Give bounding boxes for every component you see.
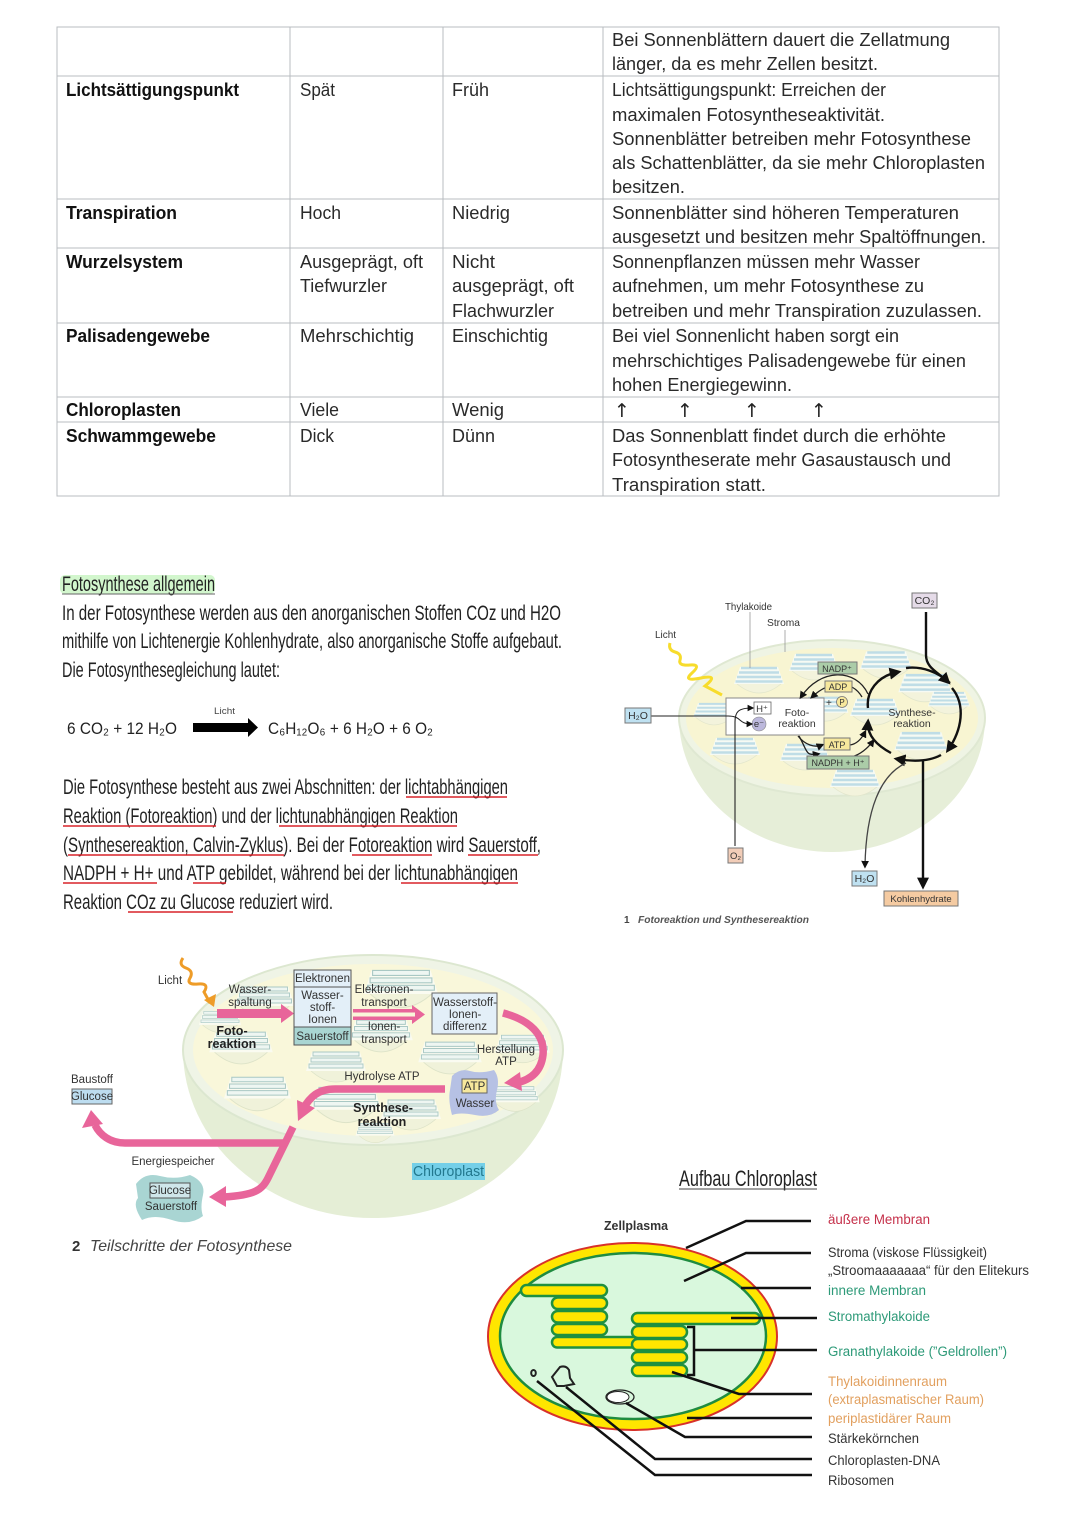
text block: Einleitung: Die Fotosynthesegleichung lautet: [62,659,280,682]
label: Baustoff Glucose [71,1074,114,1104]
row: Transpiration: Hoch [300,203,341,223]
arrowheads [82,1100,315,1207]
equation: Fotosynthesegleichung: Licht [214,706,235,717]
DNA, ribosome, starch [531,1366,634,1404]
labels: innere Membran [828,1283,926,1298]
box: Wasserstoff-Ionen-Differenz: Ionen- [449,1009,481,1021]
leader lines [537,1221,817,1475]
row: Zellatmung [612,30,950,74]
labels: Stroma (viskose Flüssigkeit) [828,1245,987,1260]
heading: Fotosynthese allgemein: Fotosynthese allgemein [62,573,215,596]
row: Transpiration: Transpiration [66,203,177,223]
diagram: Aufbau Chloroplast [488,1212,1029,1488]
row: Transpiration: Sonnenblätter sind höheren Temperaturen [612,203,959,223]
caption 1: 1 [624,915,630,926]
equation: Fotosynthesegleichung [67,706,433,738]
row: Chloroplasten: Wenig [452,400,504,420]
box stack: Elektronen, Wasserstoffionen, Sauerstoff: Sauerstoff [296,1031,349,1043]
labels: (extraplasmatischer Raum) [828,1392,984,1407]
blob: Glucose, Sauerstoff: Glucose [149,1185,191,1197]
label boxes: H₂O [855,873,874,885]
text: Synthesereaktion: Synthese- [888,707,936,719]
row: Transpiration: Niedrig [452,203,510,223]
Licht label and icon: Licht [158,975,183,987]
row: Schwammgewebe: Dick [300,426,335,446]
label boxes: CO₂ [915,595,934,607]
text: Synthesereaktion [888,707,936,730]
text: Fotoreaktion: Foto- [216,1024,248,1038]
text: Hydrolyse ATP und Synthesereaktion: reaktion [358,1115,406,1129]
row: Lichtsättigungspunkt: Sonnenblätter betreiben mehr Fotosynthese [612,129,971,149]
row: Wurzelsystem: Tiefwurzler [300,276,387,296]
text block: zwei Abschnitte: Die Fotosynthese besteht aus zwei Abschnitten: der lichtabhängigen [63,776,508,799]
text block: zwei Abschnitte: NADPH + H+ und ATP gebildet, während bei der lichtunabhängigen [63,862,518,885]
label boxes: Kohlenhydrate [890,894,952,905]
text: Fotoreaktion [208,984,414,1051]
text: Hydrolyse ATP und Synthesereaktion: Synthese- [353,1101,413,1115]
row: Lichtsättigungspunkt: Früh [452,80,489,100]
row: Wurzelsystem: aufnehmen, um mehr Fotosynthese zu [612,276,924,296]
text block: zwei Abschnitte [63,776,541,914]
row: Lichtsättigungspunkt [66,80,985,197]
row: Zellatmung: länger, da es mehr Zellen besitzt. [612,54,878,74]
box stack: Elektronen, Wasserstoffionen, Sauerstoff: Ionen [308,1014,337,1026]
row: Chloroplasten: Chloroplasten [66,400,181,420]
labels: Thylakoide, Stroma, Licht [655,601,800,668]
box: Fotoreaktion: e⁻ [754,719,764,730]
row: Wurzelsystem [66,252,982,321]
table: Sonnenblatt und Schattenblatt [57,27,999,496]
arrow: Herstellung ATP: Herstellung [477,1044,535,1056]
row: Palisadengewebe [66,326,966,395]
row: Palisadengewebe: hohen Energiegewinn. [612,375,792,395]
labels: Stärkekörnchen [828,1431,919,1446]
label boxes: H₂O [628,710,648,722]
label: Zellplasma: Zellplasma [604,1219,669,1233]
text: Fotoreaktion: spaltung [228,997,272,1009]
text: Hydrolyse ATP und Synthesereaktion: Hydrolyse ATP [344,1071,420,1083]
box stack: Elektronen, Wasserstoffionen, Sauerstoff: Elektronen [295,973,350,985]
text block: zwei Abschnitte: (Synthesereaktion, Calvin-Zyklus). Bei der Fotoreaktion wird Sauerstoff, [63,834,541,857]
small cycle arrows [798,675,873,757]
row: Lichtsättigungspunkt: besitzen. [612,177,685,197]
row: Chloroplasten: Viele [300,400,339,420]
label boxes: + [826,698,832,709]
chloroplast bowl [679,640,985,852]
table grid [57,27,999,496]
text block: Einleitung [62,602,562,682]
box: Fotoreaktion [726,698,824,735]
label: Chloroplast: Chloroplast [413,1163,485,1180]
label: Baustoff Glucose: Baustoff [71,1074,114,1086]
Synthesereaktion cycle [868,612,961,886]
labels: Thylakoidinnenraum [828,1374,947,1389]
caption 2: Teilschritte der Fotosynthese [90,1238,292,1255]
row: Schwammgewebe: Dünn [452,426,495,446]
labels [828,1212,1029,1488]
box: Wasserstoff-Ionen-Differenz [432,993,497,1034]
thylakoid stacks [199,970,550,1143]
Licht label and icon [158,958,216,1007]
labels: „Stroomaaaaaaa“ für den Elitekurs [828,1263,1029,1278]
arrow: Herstellung ATP: ATP [495,1056,517,1068]
label boxes: NADPH + H⁺ [811,758,865,768]
labels: Thylakoide, Stroma, Licht: Thylakoide [725,601,772,613]
blob: Glucose, Sauerstoff [136,1175,203,1222]
row: Lichtsättigungspunkt: Lichtsättigungspunkt [66,80,239,100]
caption 2: 2 [72,1238,80,1255]
box: Wasserstoff-Ionen-Differenz: Wasserstoff- [433,997,497,1009]
row: Wurzelsystem: Nicht [452,252,495,272]
label: Energiespeicher: Energiespeicher [131,1156,215,1168]
row: Palisadengewebe: mehrschichtiges Palisadengewebe für einen [612,351,966,371]
text: Hydrolyse ATP und Synthesereaktion [344,1071,420,1129]
row: Wurzelsystem: ausgeprägt, oft [452,276,574,296]
text block: Einleitung: In der Fotosynthese werden aus den anorganischen Stoffen COz und H2O [62,602,561,625]
text: Fotoreaktion: Ionen- [368,1021,400,1033]
row: Lichtsättigungspunkt: als Schattenblätter, da sie mehr Chloroplasten [612,153,985,173]
label boxes: P [839,698,845,707]
labels: äußere Membran [828,1212,930,1227]
row: Chloroplasten: ↑ [614,400,630,422]
box stack: Elektronen, Wasserstoffionen, Sauerstoff: Wasser- [301,990,344,1002]
heading: Fotosynthese allgemein [60,573,215,596]
text: Fotoreaktion: reaktion [208,1037,256,1051]
equation: Fotosynthesegleichung: C₆H₁₂O₆ + 6 H₂O + 6 O₂ [268,719,433,738]
blob: ATP, Wasser [449,1070,499,1116]
arrow: Herstellung ATP [477,1013,543,1091]
text: Fotoreaktion: Elektronen- [355,984,414,996]
text block: zwei Abschnitte: Reaktion COz zu Glucose reduziert wird. [63,891,333,914]
pink arrows: Fotoreaktion [217,1004,425,1024]
row: Palisadengewebe: Einschichtig [452,326,548,346]
text: Fotoreaktion: transport [361,997,407,1009]
row: Schwammgewebe: Fotosyntheserate mehr Gasaustausch und [612,450,951,470]
labels: periplastidärer Raum [828,1411,951,1426]
caption 1: Fotoreaktion und Synthesereaktion [638,914,809,926]
labels: Thylakoide, Stroma, Licht: Licht [655,629,676,641]
label: Baustoff Glucose: Glucose [71,1091,113,1103]
blob: ATP, Wasser: ATP [464,1081,486,1093]
text block: Einleitung: mithilfe von Lichtenergie Kohlenhydrate, also anorganische Stoffe aufgebaut. [62,630,562,653]
text block: zwei Abschnitte: Reaktion (Fotoreaktion) und der lichtunabhängigen Reaktion [63,805,458,828]
heading: Aufbau Chloroplast: Aufbau Chloroplast [679,1166,817,1191]
label boxes: NADP⁺ [822,664,852,674]
chloroplast bowl [183,955,563,1218]
labels: Granathylakoide (”Geldrollen”) [828,1344,1007,1359]
row: Wurzelsystem: betreiben und mehr Transpiration zuzulassen. [612,301,982,321]
row: Lichtsättigungspunkt: Spät [300,80,335,100]
row: Chloroplasten: ↑ [811,400,827,422]
row: Zellatmung: Bei Sonnenblättern dauert die Zellatmung [612,30,950,50]
row: Wurzelsystem: Flachwurzler [452,301,554,321]
diagram: Fotoreaktion und Synthesereaktion [624,593,985,926]
row: Wurzelsystem: Sonnenpflanzen müssen mehr Wasser [612,252,920,272]
row: Schwammgewebe: Transpiration statt. [612,475,766,495]
labels: Stromathylakoide [828,1309,930,1324]
row: Wurzelsystem: Wurzelsystem [66,252,183,272]
row: Chloroplasten: ↑ [677,400,693,422]
equation: Fotosynthesegleichung: 6 CO₂ + 12 H₂O [67,719,177,738]
blob: Glucose, Sauerstoff: Sauerstoff [145,1201,198,1213]
labels: Thylakoide, Stroma, Licht: Stroma [767,617,800,629]
inner membrane and stroma [500,1253,766,1419]
row: Chloroplasten [66,400,827,422]
text: Fotoreaktion: transport [361,1034,407,1046]
row: Chloroplasten: ↑ [744,400,760,422]
row: Schwammgewebe: Das Sonnenblatt findet durch die erhöhte [612,426,946,446]
label boxes: ATP [829,740,845,750]
blob: ATP, Wasser: Wasser [456,1098,494,1110]
row: Palisadengewebe: Mehrschichtig [300,326,414,346]
row: Lichtsättigungspunkt: Lichtsättigungspunkt: Erreichen der [612,80,886,100]
box stack: Elektronen, Wasserstoffionen, Sauerstoff: stoff- [310,1002,335,1014]
row: Palisadengewebe: Bei viel Sonnenlicht haben sorgt ein [612,326,899,346]
diagram: Teilschritte der Fotosynthese [71,955,563,1255]
row: Transpiration [66,203,986,247]
row: Schwammgewebe: Schwammgewebe [66,426,216,446]
row: Wurzelsystem: Ausgeprägt, oft [300,252,423,272]
box: Fotoreaktion: reaktion [778,718,816,730]
row: Schwammgewebe [66,426,951,495]
icon: Lichtstrahl [670,643,722,695]
text: Synthesereaktion: reaktion [893,718,931,730]
box: Wasserstoff-Ionen-Differenz: differenz [443,1021,487,1033]
box: Fotoreaktion: Foto- [785,707,810,719]
labels: Chloroplasten-DNA [828,1453,940,1468]
box: Fotoreaktion: H⁺ [756,704,768,715]
row: Transpiration: ausgesetzt und besitzen mehr Spaltöffnungen. [612,227,986,247]
label boxes [625,593,958,906]
labels: Ribosomen [828,1473,894,1488]
pink arrows: Glucose [95,1089,445,1197]
arrow: Reaktionspfeil [193,718,258,737]
label boxes: O₂ [730,851,741,862]
arrow: Wasser aus Synthesereaktion [865,763,906,866]
thylakoids [521,1285,760,1376]
row: Lichtsättigungspunkt: maximalen Fotosyntheseaktivität. [612,105,885,125]
row: Palisadengewebe: Palisadengewebe [66,326,210,346]
thylakoid stacks [693,651,970,796]
text: Fotoreaktion: Wasser- [229,984,271,996]
label boxes: ADP [829,682,847,692]
outer membrane [488,1243,777,1430]
arrow: Wasser zu Elektronen, Sauerstoff [651,708,752,846]
box stack: Elektronen, Wasserstoffionen, Sauerstoff [294,970,351,1045]
